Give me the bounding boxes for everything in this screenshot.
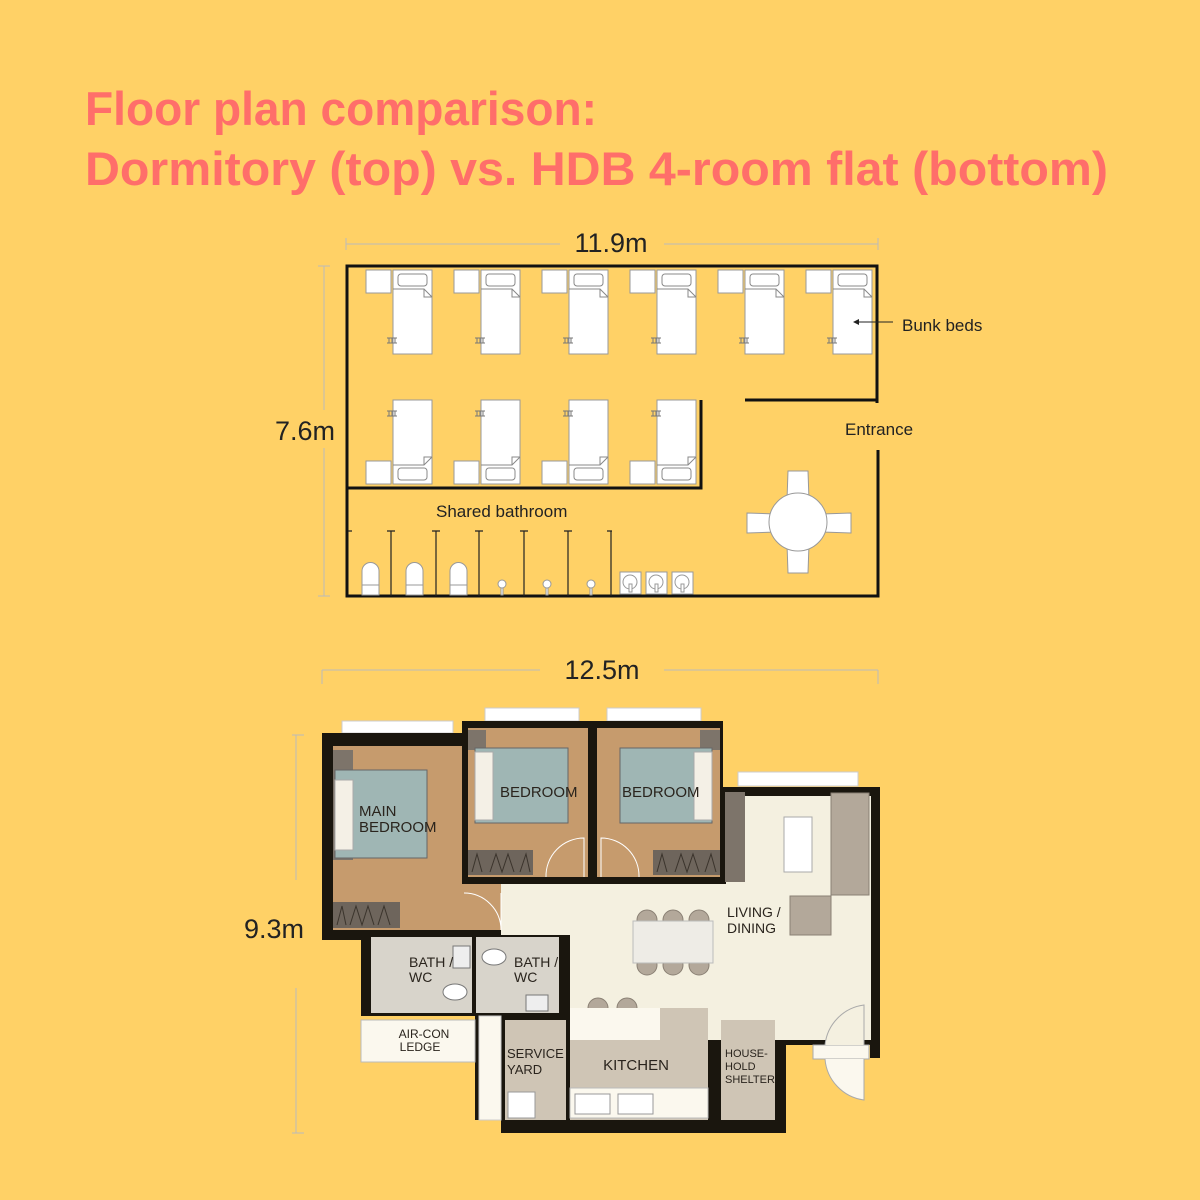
- label: entrance: Entrance: [845, 420, 913, 439]
- living / dining floor: [501, 796, 871, 1040]
- windows: [342, 708, 858, 786]
- household shelter: HOLD: [725, 1061, 756, 1073]
- service yard: YARD: [507, 1062, 542, 1077]
- bath / wc 1: WC: [409, 969, 432, 985]
- dimension: dorm width 11.9m: 11.9m: [574, 228, 648, 258]
- main bedroom: MAIN: [359, 803, 396, 820]
- urinals: [498, 580, 595, 595]
- toilets: [362, 562, 467, 595]
- label: bunk beds: Bunk beds: [902, 316, 982, 335]
- living / dining furniture: [464, 792, 869, 1018]
- main entrance door: [813, 1005, 869, 1100]
- top row bunk beds: [366, 270, 872, 354]
- bath / wc 2: [476, 937, 559, 1013]
- household shelter: HOUSE-: [725, 1048, 768, 1060]
- wall footprint: [322, 721, 880, 1133]
- service yard: [505, 1020, 566, 1120]
- label: shared bathroom: Shared bathroom: [436, 502, 567, 521]
- title: Dormitory (top) vs. HDB 4-room flat (bottom): [85, 142, 1108, 195]
- bedroom 2: BEDROOM: [500, 784, 578, 801]
- dimension: dorm depth 7.6m: 7.6m: [275, 416, 335, 446]
- living / dining furniture: DINING: [727, 920, 776, 936]
- bedroom 2: [468, 728, 588, 877]
- main bedroom: BEDROOM: [359, 819, 437, 836]
- air-con ledge: AIR-CON: [399, 1027, 449, 1041]
- title: Floor plan comparison:: [85, 82, 597, 135]
- sinks: [620, 572, 693, 594]
- bedroom 3: BEDROOM: [622, 784, 700, 801]
- HDB 4-room flat floor plan: [322, 708, 880, 1133]
- kitchen: [570, 1008, 708, 1120]
- air-con ledge: [361, 1016, 501, 1120]
- dimension: HDB depth 9.3m: [244, 735, 304, 1133]
- household shelter: [721, 1020, 775, 1120]
- dining table with chairs: [747, 471, 851, 573]
- label: bunk beds: [853, 316, 982, 335]
- bath / wc 2: WC: [514, 969, 537, 985]
- dimension: dorm depth 7.6m: [275, 266, 335, 596]
- living / dining furniture: LIVING /: [727, 904, 781, 920]
- dimension: dorm width 11.9m: [346, 228, 878, 258]
- dimension: HDB width 12.5m: [322, 655, 878, 685]
- air-con ledge: LEDGE: [400, 1040, 440, 1054]
- bath / wc 1: [371, 937, 472, 1013]
- main bedroom: [333, 746, 501, 930]
- dimension: HDB width 12.5m: 12.5m: [564, 655, 640, 685]
- title: [85, 82, 1108, 195]
- service yard: SERVICE: [507, 1046, 564, 1061]
- bath / wc 1: BATH /: [409, 954, 453, 970]
- dimension: HDB depth 9.3m: 9.3m: [244, 914, 304, 944]
- bedroom 3: [597, 728, 720, 877]
- household shelter: SHELTER: [725, 1074, 775, 1086]
- bath / wc 2: BATH /: [514, 954, 558, 970]
- bottom row bunk beds: [366, 400, 696, 484]
- kitchen: KITCHEN: [603, 1057, 669, 1074]
- bathroom partitions: [348, 531, 612, 596]
- dormitory floor plan: [347, 266, 982, 596]
- dorm walls: [347, 266, 878, 596]
